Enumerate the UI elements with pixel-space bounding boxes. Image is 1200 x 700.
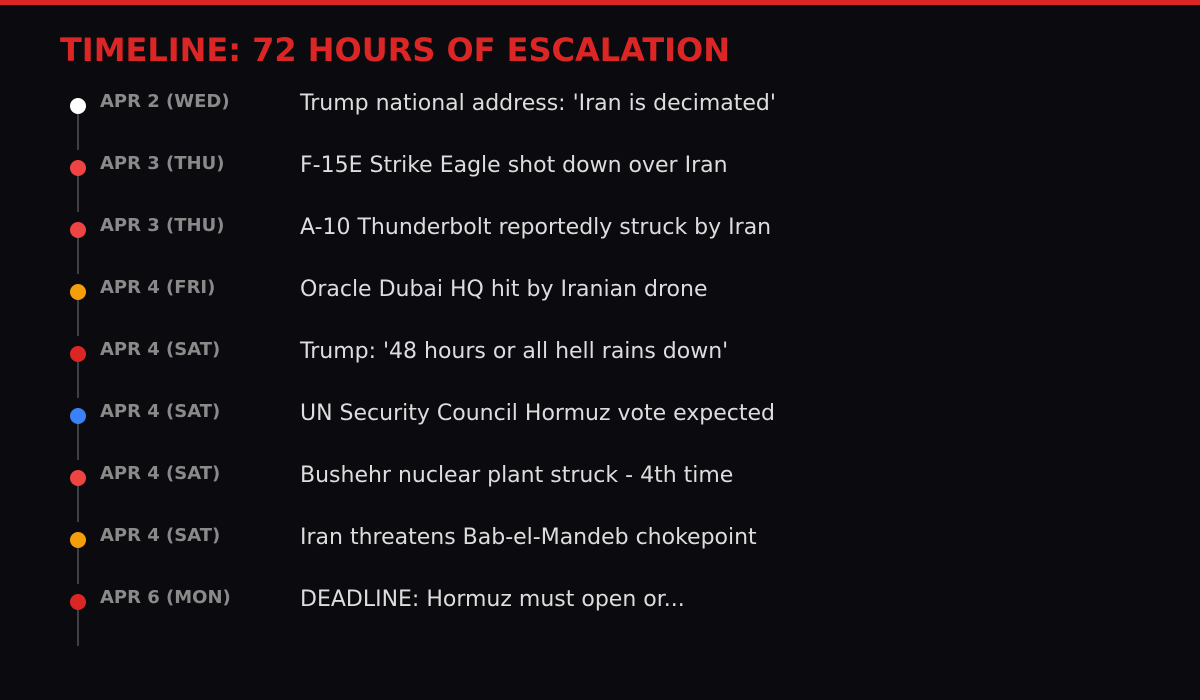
event: Bab-el-Mandeb: APR 4 (SAT) [100,525,220,546]
event: 48 hours [70,339,728,364]
event: Bushehr [70,463,733,488]
event: Oracle Dubai [70,277,707,302]
event: UN vote: UN Security Council Hormuz vote expected [300,401,775,426]
event: Oracle Dubai: APR 4 (FRI) [100,277,215,298]
event: F-15E: F-15E Strike Eagle shot down over Iran [300,153,728,178]
event: A-10: A-10 Thunderbolt reportedly struck by Iran [300,215,771,240]
event: Apr 2 address: APR 2 (WED) [100,91,230,112]
timeline [70,91,776,646]
event: deadline [70,587,685,612]
event: deadline: APR 6 (MON) [100,587,231,608]
event: F-15E [70,153,728,178]
event: Bab-el-Mandeb: Iran threatens Bab-el-Mandeb chokepoint [300,525,757,550]
event: UN vote [70,401,775,426]
event: UN vote: APR 4 (SAT) [100,401,220,422]
title: TIMELINE: 72 HOURS OF ESCALATION [60,31,730,69]
event: Oracle Dubai: Oracle Dubai HQ hit by Iranian drone [300,277,707,302]
event: Bushehr: Bushehr nuclear plant struck - 4th time [300,463,733,488]
event: Apr 2 address [70,91,776,116]
event: Bab-el-Mandeb [70,525,757,550]
event: deadline: DEADLINE: Hormuz must open or... [300,587,685,612]
event: 48 hours: APR 4 (SAT) [100,339,220,360]
event: A-10: APR 3 (THU) [100,215,224,236]
event: Apr 2 address: Trump national address: 'Iran is decimated' [299,91,776,116]
event: F-15E: APR 3 (THU) [100,153,224,174]
event: A-10 [70,215,771,240]
event: 48 hours: Trump: '48 hours or all hell rains down' [299,339,728,364]
event: Bushehr: APR 4 (SAT) [100,463,220,484]
